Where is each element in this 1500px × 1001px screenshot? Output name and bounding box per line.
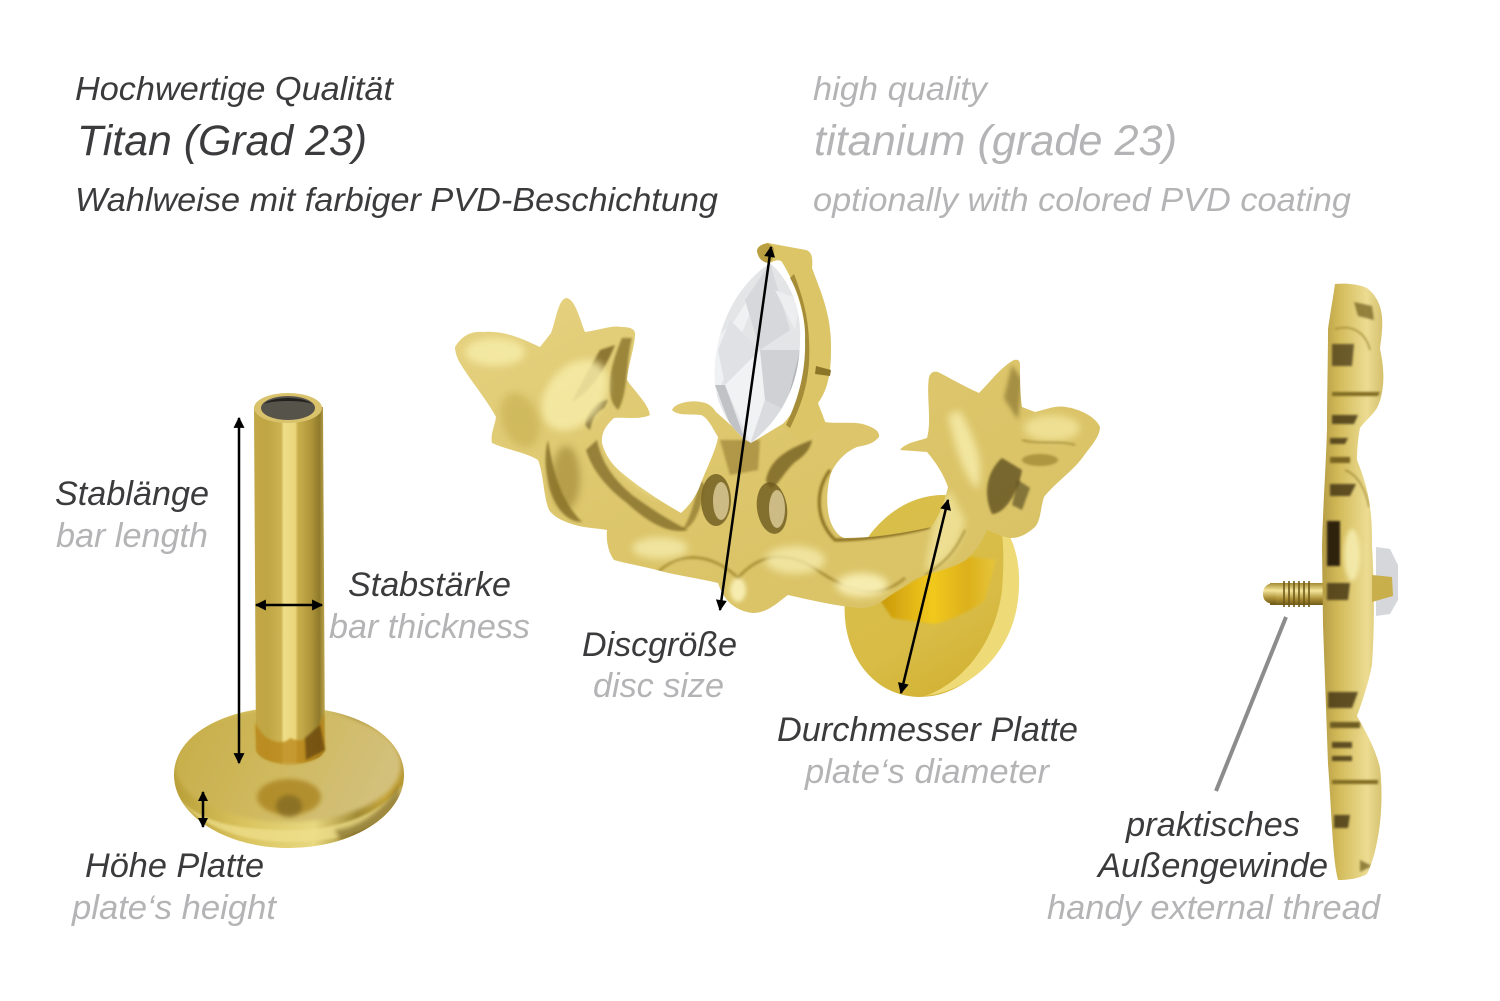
label: disc size: Discgröße bbox=[582, 626, 737, 664]
heading block: German bbox=[75, 70, 719, 218]
infographic canvas bbox=[56, 76, 1398, 926]
setting post bbox=[1372, 575, 1393, 602]
stone setting rim bbox=[757, 243, 831, 442]
label: external thread: praktisches bbox=[1125, 806, 1300, 844]
label: external thread bbox=[1047, 806, 1381, 927]
base plate and post bbox=[817, 470, 1045, 722]
label: plate diameter: Durchmesser Platte bbox=[777, 711, 1078, 749]
threaded pin bbox=[1263, 581, 1324, 607]
heading block: German: Titan (Grad 23) bbox=[77, 117, 367, 165]
label: plate diameter: plate‘s diameter bbox=[804, 753, 1051, 791]
leader line: external thread bbox=[1216, 617, 1286, 791]
ornate gold body bbox=[450, 290, 1110, 620]
label: bar thickness: Stabstärke bbox=[348, 566, 511, 604]
heading block: English: high quality bbox=[813, 70, 990, 107]
gold side body bbox=[1322, 284, 1384, 880]
gemstone side bbox=[1376, 547, 1398, 616]
marquise gemstone bbox=[714, 263, 800, 443]
label: bar thickness bbox=[329, 566, 530, 646]
heading block: English: titanium (grade 23) bbox=[814, 117, 1177, 165]
label: bar thickness: bar thickness bbox=[329, 608, 530, 646]
label: external thread: Außengewinde bbox=[1096, 847, 1328, 885]
label: plate height: Höhe Platte bbox=[85, 847, 264, 885]
label: bar length: Stablänge bbox=[55, 475, 209, 513]
label: bar length bbox=[55, 475, 209, 555]
label: plate height bbox=[71, 847, 278, 927]
dimension arrow: bar thickness bbox=[256, 604, 322, 606]
product: side view with external thread bbox=[1263, 280, 1398, 885]
product: ornate disc front view bbox=[450, 243, 1110, 722]
label: bar length: bar length bbox=[56, 517, 208, 555]
dimension arrow: plate height bbox=[202, 792, 204, 827]
heading block: German: Wahlweise mit farbiger PVD-Beschichtung bbox=[75, 181, 719, 218]
label: plate diameter bbox=[777, 711, 1078, 791]
dimension arrow: plate diameter bbox=[901, 500, 948, 693]
heading block: English bbox=[813, 70, 1352, 218]
label: disc size: disc size bbox=[593, 667, 724, 705]
heading block: German: Hochwertige Qualität bbox=[75, 70, 395, 107]
label: plate height: plate‘s height bbox=[71, 889, 278, 927]
dimension arrow: bar length bbox=[238, 418, 240, 763]
heading block: English: optionally with colored PVD coating bbox=[813, 181, 1352, 218]
dimension arrow: disc size bbox=[720, 247, 771, 610]
label: disc size bbox=[582, 626, 737, 705]
label: external thread: handy external thread bbox=[1047, 889, 1381, 927]
product: threaded labret pin bbox=[170, 393, 410, 850]
